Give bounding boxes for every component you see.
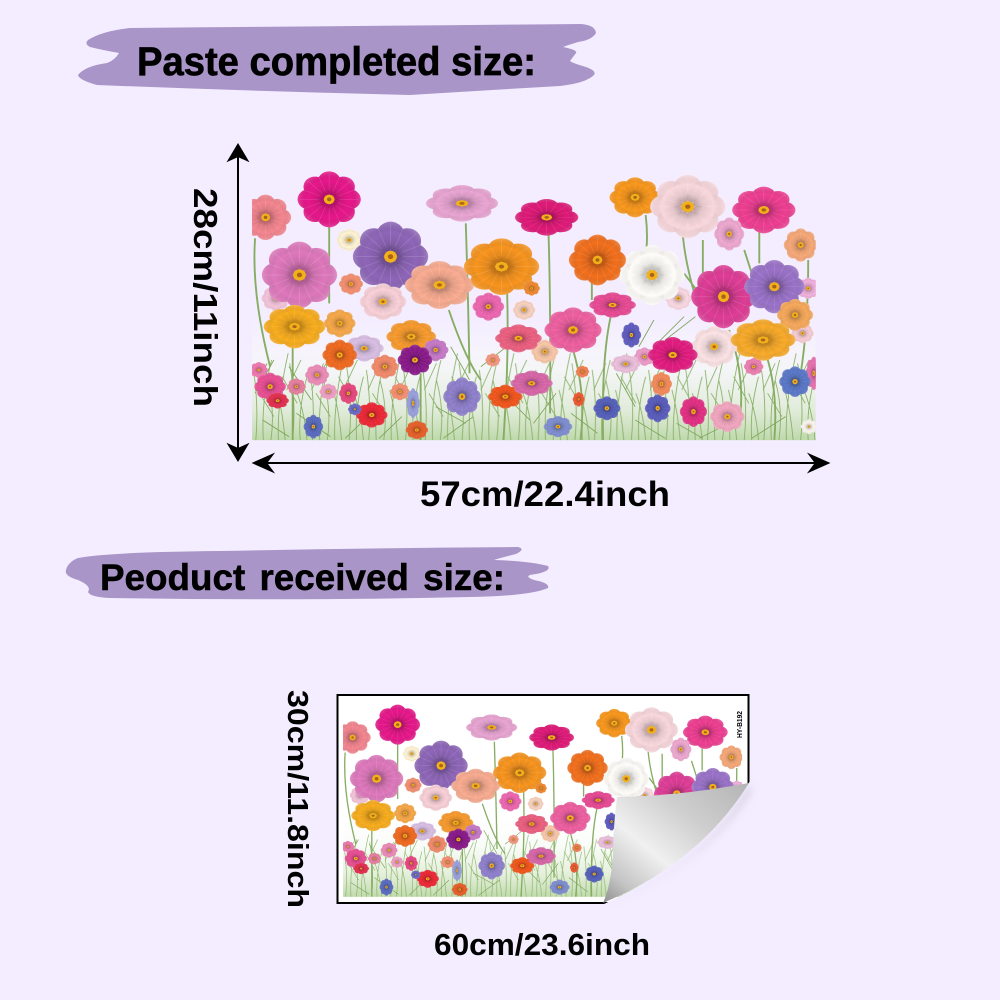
- sticker sheet as received: [334, 695, 752, 905]
- height label: 28cm/11inch: 28cm/11inch: [187, 188, 224, 407]
- heading text: Paste completed size:: [137, 40, 536, 84]
- sheet frame: [338, 695, 748, 903]
- vertical dimension arrow: 28cm: [229, 145, 247, 460]
- flower meadow: pasted result: [240, 171, 822, 440]
- height label: 30cm/11.8inch: 30cm/11.8inch: [281, 690, 313, 908]
- horizontal dimension arrow: 57cm: [254, 455, 828, 471]
- product code: HY-B192: [737, 711, 744, 738]
- width label: 57cm/22.4inch: 57cm/22.4inch: [420, 475, 670, 514]
- flower meadow on sheet: [334, 705, 747, 897]
- heading: paste completed size: [78, 24, 596, 95]
- fold shadow: [606, 785, 752, 905]
- heading text: Peoduct received size:: [100, 557, 505, 598]
- brush stroke banner: [66, 547, 549, 599]
- cut-away corner: [602, 781, 752, 905]
- heading: product received size: [66, 547, 549, 599]
- brush stroke banner: [78, 24, 596, 95]
- peeled corner: [603, 783, 749, 903]
- width label: 60cm/23.6inch: 60cm/23.6inch: [434, 927, 650, 962]
